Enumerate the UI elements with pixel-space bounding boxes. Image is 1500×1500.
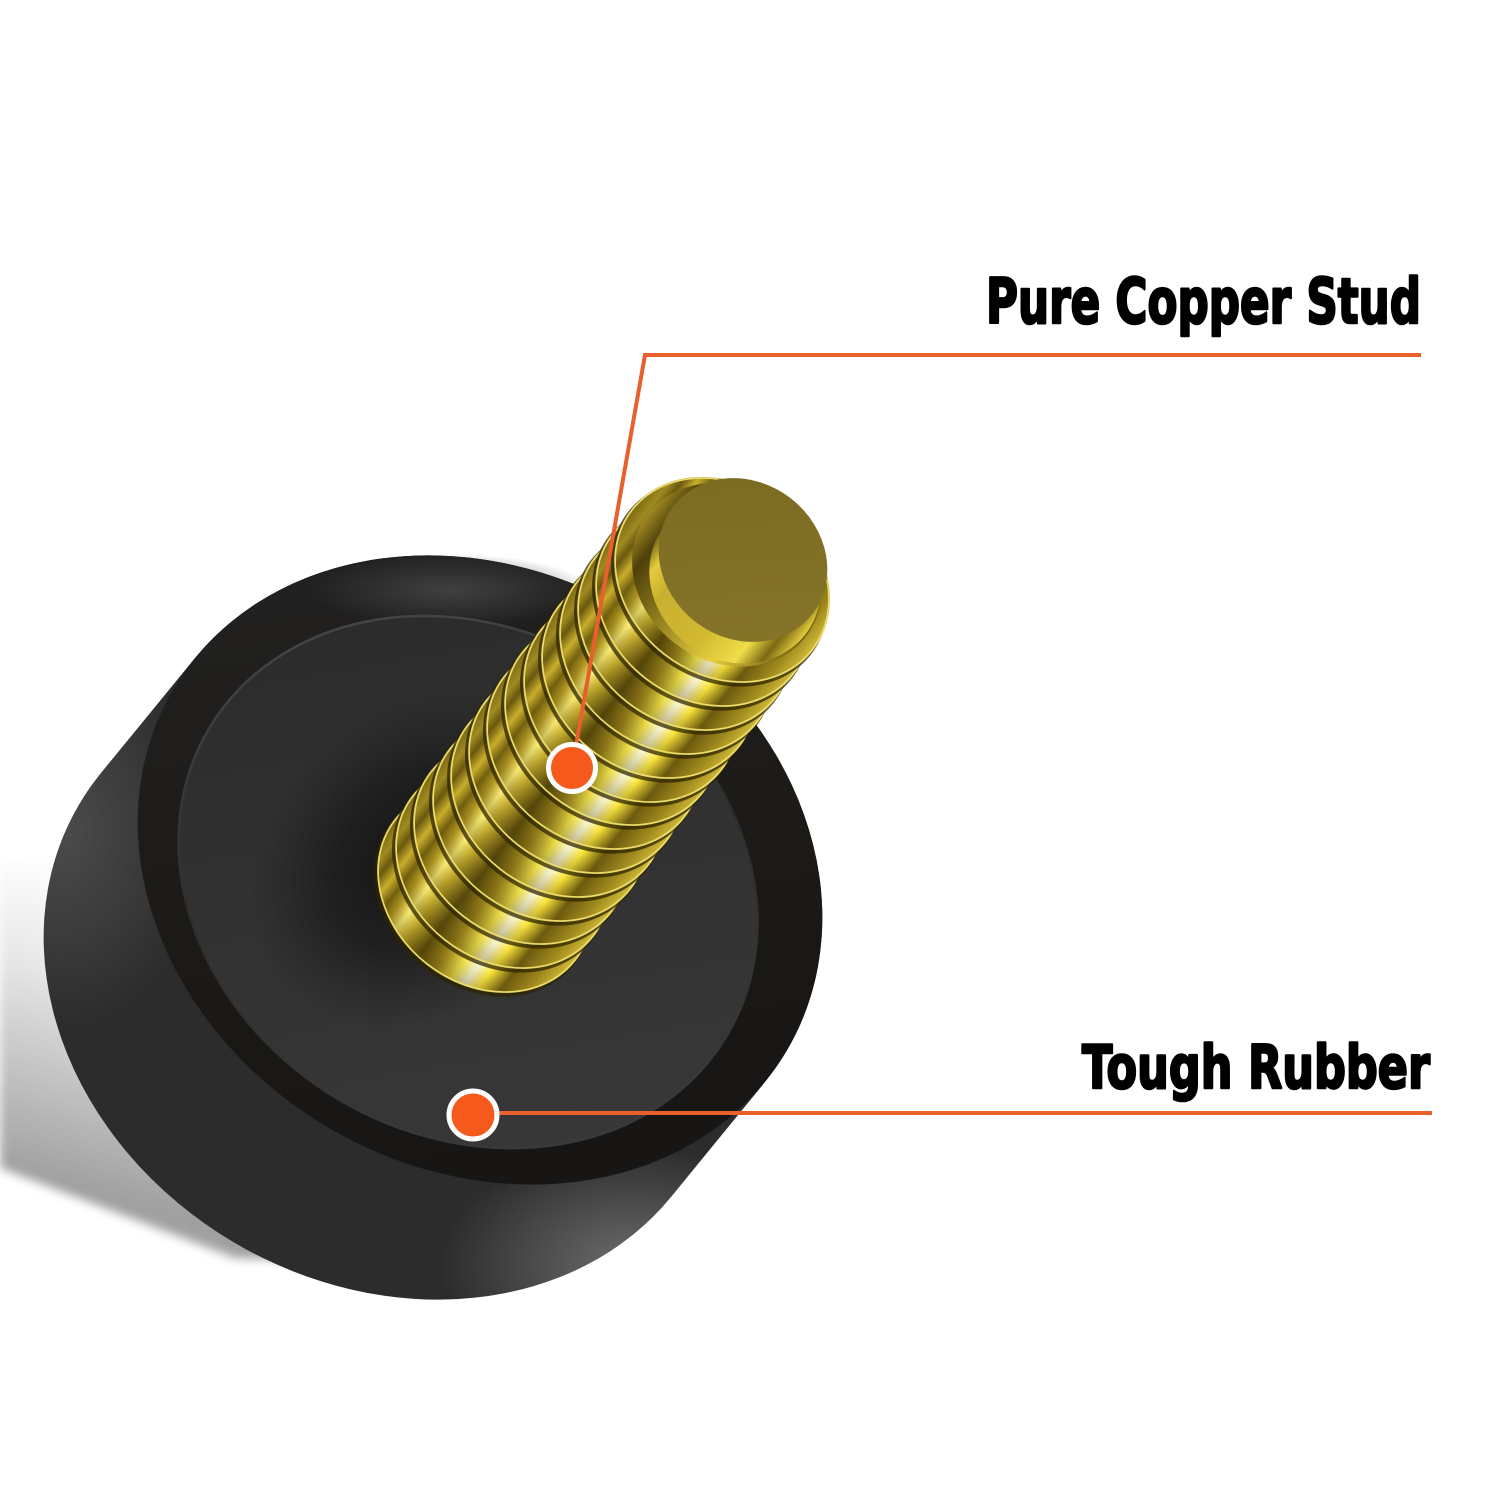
- rubber body side wall: [44, 555, 822, 1300]
- stud end face: [626, 444, 860, 676]
- rubber top rim: [22, 432, 938, 1308]
- callout: tough rubber: [449, 1033, 1432, 1139]
- stud neck: [595, 446, 859, 704]
- stud end collar: [616, 462, 854, 698]
- leader line: [572, 355, 1421, 768]
- leader line: [495, 1111, 1432, 1115]
- marker dot: [449, 1091, 497, 1139]
- cast shadow on the left: [0, 860, 300, 1260]
- brass threaded stud: [333, 434, 872, 1039]
- marker dot: [548, 744, 596, 792]
- callout: pure copper stud: [548, 265, 1421, 792]
- rubber inner recessed disc: [80, 511, 856, 1253]
- product: rubber foot with stud: [44, 477, 830, 1300]
